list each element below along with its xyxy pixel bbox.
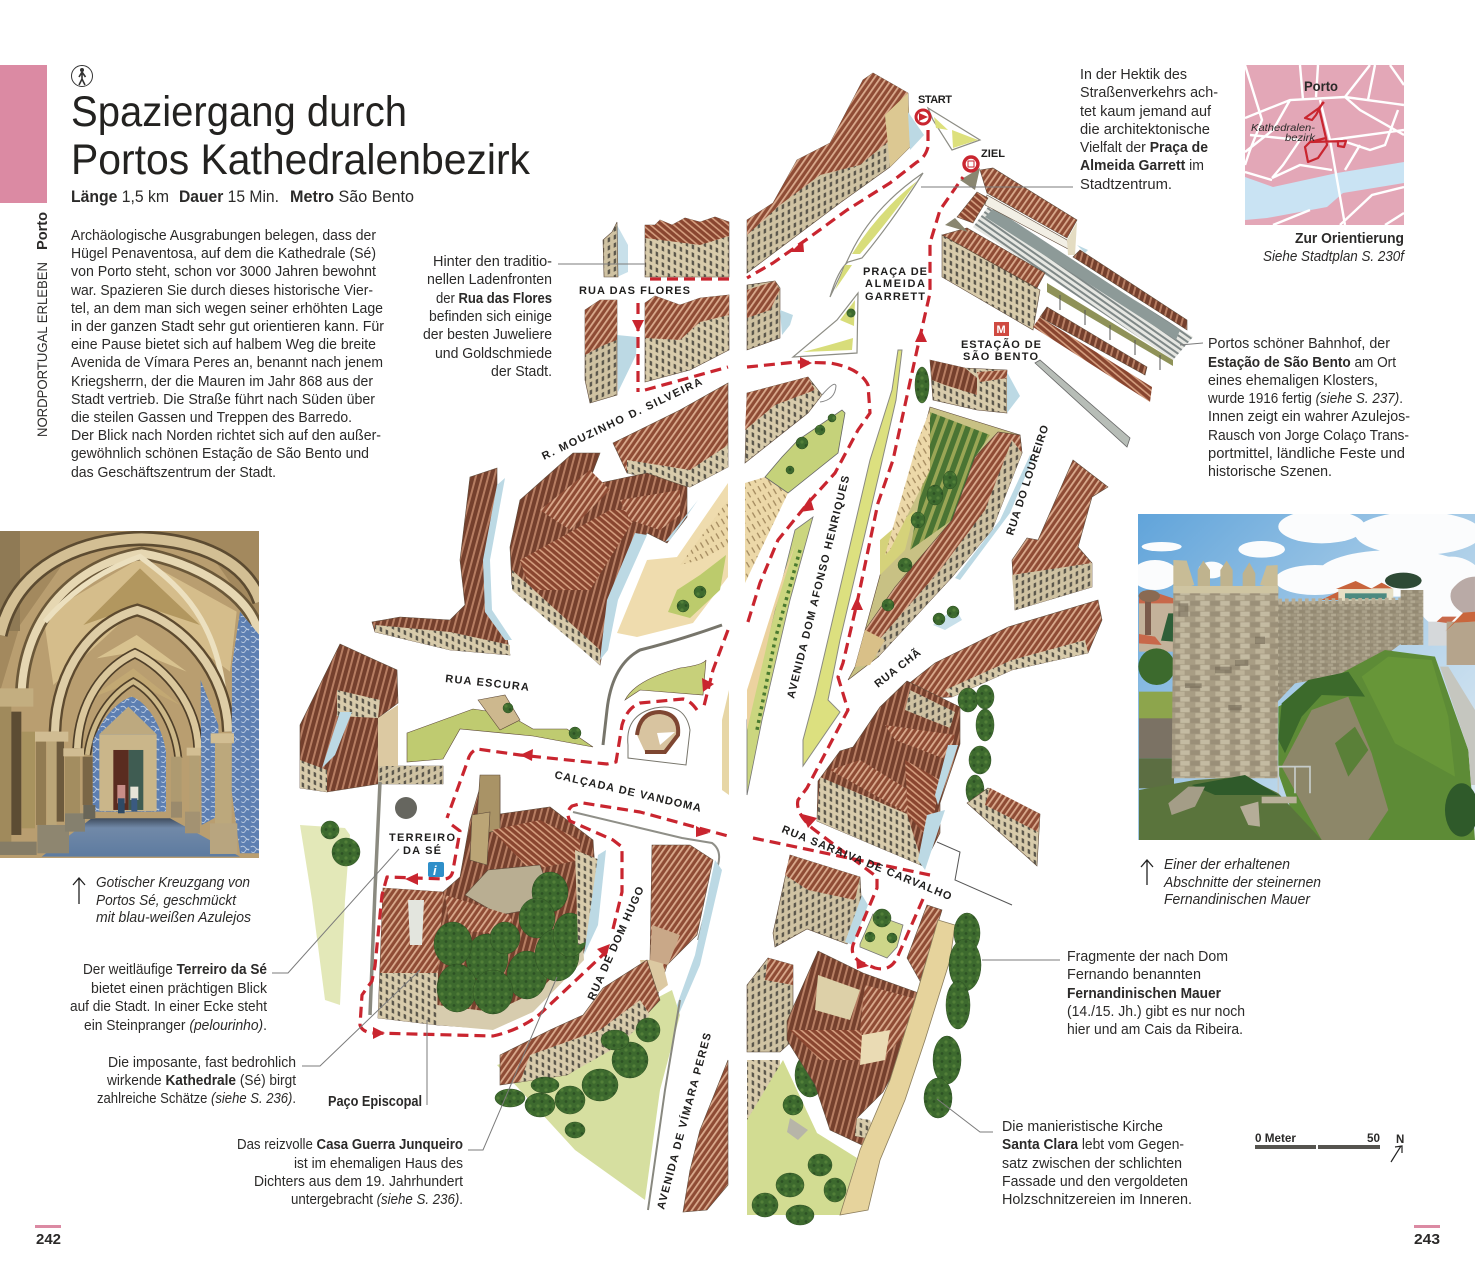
Avenida Vímara east strip [683, 1060, 728, 1212]
info icon: i [433, 863, 437, 878]
callout: Terreiro da Sé [70, 962, 268, 1034]
olive under strip [1047, 283, 1173, 366]
callout: Terreiro da Sé: Der weitläufige Terreiro da Sé [83, 962, 267, 978]
caption: wall [1141, 857, 1321, 908]
lower row and green slope [495, 960, 680, 1200]
callout: Santa Clara: Fassade und den vergoldeten [1002, 1174, 1188, 1190]
street labels: CALÇADA DE VANDOMA [553, 769, 702, 815]
street labels: DA SÉ [403, 844, 441, 857]
garden with palm [860, 909, 903, 958]
bottom garden [747, 1053, 857, 1225]
callout: Praça de Almeida Garrett: Stadtzentrum. [1080, 177, 1172, 193]
callout: Casa Guerra Junqueiro: ist im ehemaligen Haus des [294, 1156, 463, 1172]
callout: Fernandinische Mauer: Fernandinischen Mauer [1067, 986, 1221, 1002]
caption: wall: Fernandinischen Mauer [1164, 892, 1311, 908]
corner wing [957, 192, 988, 223]
pink section tab [0, 65, 47, 203]
street labels: PRAÇA DE [863, 266, 927, 278]
hotel block [817, 681, 960, 870]
locator caption: Zur Orientierung [1295, 231, 1404, 247]
callout: Kathedrale: zahlreiche Schätze (siehe S. 236). [97, 1091, 296, 1107]
nave [492, 820, 580, 870]
intro text: Hügel Penaventosa, auf dem die Kathedrale (Sé) [71, 246, 376, 262]
left column group [0, 688, 95, 855]
water beside central block [600, 500, 698, 660]
callout: Estação de São Bento: Innen zeigt ein wahrer Azulejos- [1208, 409, 1410, 425]
street labels: GARRETT [865, 291, 925, 303]
callout: Rua das Flores: Hinter den traditio- [433, 254, 552, 270]
palace wing roof [380, 888, 443, 975]
central roof block [510, 453, 687, 665]
scale bar: 50 [1367, 1133, 1380, 1145]
cathedral complex [378, 775, 606, 1030]
palace facade [378, 973, 438, 1025]
rail strip [1035, 360, 1130, 447]
Mouzinho row [613, 383, 728, 487]
São Bento station [942, 168, 1193, 447]
intro text: Archäologische Ausgrabungen belegen, dass der [71, 228, 376, 244]
strip at gutter [722, 690, 729, 795]
callout: Kathedrale: Die imposante, fast bedrohlich [108, 1055, 296, 1071]
tree row and house east [937, 685, 1040, 905]
street labels [389, 266, 1052, 1211]
floor [42, 818, 240, 857]
western avenue strip [747, 517, 813, 795]
callout: Estação de São Bento: Portos schöner Bahnhof, der [1208, 336, 1390, 352]
street labels: ESTAÇÃO DE [961, 338, 1041, 351]
intro text: Kriegsherrn, der die Mauren im Jahr 868 aus der [71, 374, 373, 390]
curved road outline [603, 625, 722, 745]
caption: cloister: Gotischer Kreuzgang von [96, 875, 250, 891]
caption: cloister: Portos Sé, geschmückt [96, 893, 237, 909]
street labels: RUA CHÃ [872, 646, 923, 690]
callout: Fernandinische Mauer: Fragmente der nach Dom [1067, 949, 1228, 965]
callout: Rua das Flores: der besten Juweliere [423, 327, 552, 343]
long central strip [803, 350, 902, 766]
callout: Casa Guerra Junqueiro: Dichters aus dem 19. Jahrhundert [254, 1174, 463, 1190]
caption: cloister [73, 875, 251, 926]
buildings above orchard [915, 360, 1020, 413]
locator map: bezirk [1285, 132, 1316, 144]
left background buildings [1138, 590, 1175, 788]
wall and green at west of square [300, 782, 417, 1015]
callout: Estação de São Bento: Rausch von Jorge Colaço Trans- [1208, 428, 1409, 444]
vault panels [0, 531, 260, 705]
head building facade [942, 235, 1040, 330]
intro text: war. Spazieren Sie durch dieses historische Vier- [70, 283, 373, 299]
intro text: Avenida de Vímara Peres an, benannt nach jenem [71, 355, 383, 371]
route facts: Länge 1,5 km [71, 187, 169, 206]
garden trees [434, 872, 587, 1014]
end wall with azulejos [93, 697, 166, 812]
route: dashed red walking line [360, 130, 963, 1039]
intro text: in der ganzen Stadt sehr gut orientieren kann. Für [71, 319, 384, 335]
icon: walking figure [72, 66, 92, 86]
western hillside buildings [300, 644, 443, 792]
intro text: Stadt vertrieb. Die Straße führt nach Süden über [71, 392, 375, 408]
block south of Saraiva [773, 855, 868, 947]
callout: Kathedrale: wirkende Kathedrale (Sé) birgt [106, 1073, 296, 1089]
intro text: Der Blick nach Norden richtet sich auf den außer- [71, 428, 381, 444]
start marker: START [918, 94, 952, 106]
street labels: SÃO BENTO [963, 350, 1038, 363]
Rua de Dom Hugo buildings [573, 812, 722, 1030]
intro text: die steilen Gassen und Treppen des Barredo. [71, 410, 352, 426]
green hillside [1278, 650, 1475, 840]
page number 243: 243 [1414, 1231, 1440, 1248]
upper wing [980, 168, 1077, 238]
photo: Fernandine wall [1132, 510, 1475, 843]
lower wing [1040, 307, 1147, 375]
curtain wall [1278, 590, 1423, 702]
intro text: von Porto steht, schon vor 3000 Jahren bewohnt [71, 264, 376, 280]
locator map: Kathedralen- [1251, 122, 1316, 134]
start marker [916, 94, 952, 124]
street labels: R. MOUZINHO D. SILVEIRA [540, 376, 704, 463]
intro text [70, 228, 384, 481]
title: Spaziergang durch [71, 88, 407, 136]
callout: Fernandinische Mauer: Fernando benannten [1067, 967, 1201, 983]
intro text: eine Pause bietet sich auf halbem Weg die breite [71, 337, 376, 353]
street labels: RUA SARAIVA DE CARVALHO [780, 824, 954, 903]
callout: Fernandinische Mauer: hier und am Cais da Ribeira. [1067, 1022, 1243, 1038]
sand park and green [617, 483, 728, 637]
head building roof [942, 228, 1045, 288]
caption: wall: Einer der erhaltenen [1164, 857, 1290, 873]
metro icon: M [996, 324, 1006, 336]
callout: Santa Clara: satz zwischen der schlichten [1002, 1156, 1182, 1172]
info icon [428, 862, 444, 878]
callout: Casa Guerra Junqueiro [237, 1137, 463, 1208]
finish marker: ZIEL [981, 148, 1005, 160]
north arrow [1391, 1134, 1404, 1162]
callout: Casa Guerra Junqueiro: Das reizvolle Casa Guerra Junqueiro [237, 1137, 463, 1153]
west buildings right page [747, 958, 793, 1195]
callout: Rua das Flores: und Goldschmiede [435, 346, 552, 362]
caption: wall: Abschnitte der steinernen [1163, 875, 1321, 891]
locator map [1245, 65, 1404, 225]
caption: cloister: mit blau-weißen Azulejos [96, 910, 251, 926]
right azulejo walls [201, 612, 259, 853]
callout: Fernandinische Mauer [1067, 949, 1245, 1038]
callout: Santa Clara [1002, 1119, 1192, 1208]
streets on locator map [1245, 65, 1404, 225]
vertical section label: NORDPORTUGAL ERLEBEN [34, 262, 50, 437]
orchard wedge [848, 407, 1033, 680]
finish marker [964, 148, 1005, 171]
Rua Chã row [888, 600, 1102, 700]
square islands [793, 108, 980, 357]
callout: Praça de Almeida Garrett: Vielfalt der Praça de [1080, 140, 1208, 156]
metro icon [994, 322, 1009, 336]
callout: Rua das Flores [423, 254, 552, 380]
thin road line along avenue [648, 1000, 680, 1210]
callout: Santa Clara: Santa Clara lebt vom Gegen- [1002, 1137, 1184, 1153]
callout: Rua das Flores: befinden sich einige [429, 309, 552, 325]
walk route on locator map [1305, 102, 1346, 162]
railway at right [1440, 667, 1475, 785]
block below Mouzinho [745, 377, 836, 463]
street labels: RUA DAS FLORES [579, 285, 690, 297]
map: illustrated district, left page [300, 217, 729, 1212]
callout: Casa Guerra Junqueiro: untergebracht (siehe S. 236). [291, 1192, 463, 1208]
callout: Estação de São Bento: wurde 1916 fertig (siehe S. 237). [1207, 391, 1403, 407]
street labels: ALMEIDA [865, 278, 925, 290]
callout: Estação de São Bento [1207, 336, 1410, 480]
callout: Praça de Almeida Garrett: Almeida Garrett im [1080, 158, 1204, 174]
small garden [933, 606, 962, 630]
callout: Estação de São Bento: portmittel, ländliche Feste und [1208, 446, 1405, 462]
intro text: das Geschäftszentrum der Stadt. [71, 465, 276, 481]
callout: Praça de Almeida Garrett: tet kaum jemand auf [1080, 104, 1212, 120]
street labels: AVENIDA DOM AFONSO HENRIQUES [785, 475, 852, 700]
north arrow: N [1396, 1134, 1404, 1146]
right columns [171, 733, 237, 854]
intro text: gewöhnlich schönen Estação de São Bento und [71, 446, 369, 462]
callout: Kathedrale [97, 1055, 296, 1107]
scale bar: 0 Meter [1255, 1133, 1297, 1145]
street labels: TERREIRO [389, 832, 455, 844]
callout: Estação de São Bento: Estação de São Bento am Ort [1208, 355, 1396, 371]
curved western row [372, 468, 512, 655]
Rua das Flores buildings [585, 217, 729, 403]
tower [1172, 560, 1278, 778]
photo: cathedral cloister [0, 525, 267, 862]
stone arches [0, 538, 260, 758]
locator map: Porto [1304, 78, 1338, 94]
callout: Praça de Almeida Garrett: die architektonische [1080, 122, 1210, 138]
street labels: AVENIDA DE VÍMARA PERES [654, 1032, 714, 1211]
title: Portos Kathedralenbezirk [71, 136, 530, 184]
Santa Clara convent [787, 905, 942, 1145]
portal [99, 707, 157, 813]
cathedral towers [476, 775, 500, 835]
locator caption: Siehe Stadtplan S. 230f [1263, 249, 1406, 265]
callout: Fernandinische Mauer: (14./15. Jh.) gibt es nur noch [1067, 1004, 1245, 1020]
narrow building north of convent [907, 905, 942, 981]
route arrows [373, 240, 927, 1039]
Rua do Loureiro block [1012, 460, 1108, 610]
street labels: RUA DO LOUREIRO [1004, 423, 1052, 537]
callout: Rua das Flores: nellen Ladenfronten [427, 272, 552, 288]
street labels: RUA ESCURA [445, 673, 530, 694]
callout: Terreiro da Sé: bietet einen prächtigen Blick [91, 981, 268, 997]
route facts [71, 187, 414, 206]
locator caption [1263, 231, 1406, 265]
scale bar [1255, 1133, 1380, 1149]
callout: Estação de São Bento: eines ehemaligen Klosters, [1208, 373, 1378, 389]
callout: Rua das Flores: der Stadt. [491, 364, 552, 380]
callout: Rua das Flores: der Rua das Flores [436, 291, 552, 307]
cathedral garden wall [437, 945, 584, 1030]
stairway wall [840, 920, 955, 1215]
leader lines [272, 187, 1203, 1150]
street labels: RUA DE DOM HUGO [586, 885, 647, 1002]
eastern tree line [924, 913, 981, 1118]
callout: Santa Clara: Holzschnitzereien im Inneren. [1002, 1192, 1192, 1208]
callout: Estação de São Bento: historische Szenen. [1208, 464, 1332, 480]
amphitheatre court [625, 660, 706, 765]
Rua Escura hill garden [407, 695, 593, 762]
park triangle and sand [745, 410, 845, 583]
north block at Praça [747, 73, 924, 350]
vertical section label: Porto [34, 212, 51, 250]
foreground rocks and plants [1139, 767, 1322, 840]
callout: Praça de Almeida Garrett [1080, 67, 1218, 193]
callout: Praça de Almeida Garrett: In der Hektik des [1080, 67, 1187, 83]
map: illustrated district, right page [745, 73, 1193, 1225]
callout: Terreiro da Sé: auf die Stadt. In einer Ecke steht [70, 999, 267, 1015]
route facts: Dauer 15 Min. [179, 187, 279, 206]
callout: Santa Clara: Die manieristische Kirche [1002, 1119, 1163, 1135]
callout: Praça de Almeida Garrett: Straßenverkehrs ach- [1080, 85, 1218, 101]
title [71, 88, 530, 184]
sky and clouds [1132, 510, 1475, 843]
house behind wall [1321, 573, 1475, 665]
river on locator map [1245, 162, 1404, 220]
callout: Paço Episcopal: Paço Episcopal [328, 1094, 422, 1110]
route facts: Metro São Bento [290, 187, 414, 206]
glass train shed [973, 207, 1193, 360]
callout: Terreiro da Sé: ein Steinpranger (pelourinho). [84, 1018, 267, 1034]
page number 242: 242 [36, 1231, 61, 1248]
intro text: tel, an dem man sich wegen seiner erhöhten Lage [71, 301, 383, 317]
